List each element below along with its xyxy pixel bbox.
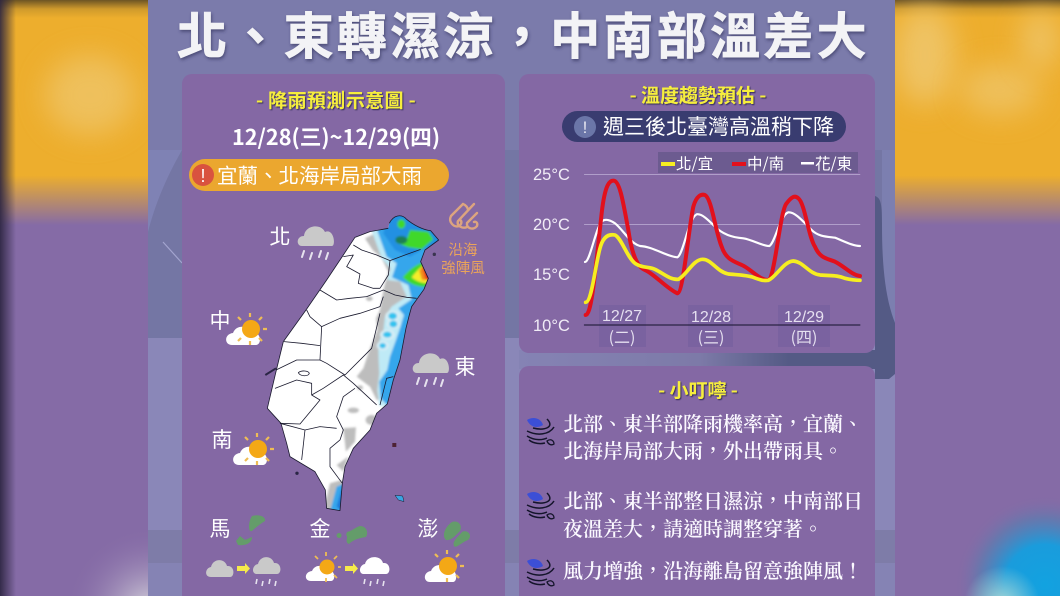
region labels: 南 bbox=[212, 424, 232, 454]
date range: 12/28(三)~12/29(四) bbox=[232, 121, 440, 152]
date labels bbox=[599, 305, 830, 348]
region labels: 澎 bbox=[418, 513, 438, 543]
y axis labels: 25°C bbox=[533, 166, 570, 184]
tip text 2: 夜溫差大，請適時調整穿著。 bbox=[563, 513, 823, 542]
heading: rainfall: - 降雨預測示意圖 - bbox=[256, 86, 416, 113]
tip text 2: 北部、東半部整日濕涼，中南部日 bbox=[563, 485, 863, 514]
region labels: 馬 bbox=[210, 513, 230, 543]
icon: Kinmen islands bbox=[337, 526, 367, 544]
panel: temperature trend bbox=[519, 74, 875, 353]
date labels: (二) bbox=[609, 324, 635, 348]
icon: east rain cloud bbox=[413, 353, 449, 386]
tip text 3: 風力增強，沿海離島留意強陣風！ bbox=[563, 555, 863, 584]
tip text 1: 北海岸局部大雨，外出帶雨具。 bbox=[563, 435, 843, 464]
alert pill: ! bbox=[200, 166, 206, 186]
date labels: 12/27 bbox=[602, 308, 642, 325]
label: coastal gusts: 強陣風 bbox=[441, 257, 485, 278]
tip text 1: 北部、東半部降雨機率高，宜蘭、 bbox=[563, 408, 863, 437]
region labels: 北 bbox=[270, 221, 290, 251]
date labels: 12/29 bbox=[784, 309, 824, 326]
heading: temperature: - 溫度趨勢預估 - bbox=[630, 81, 766, 108]
heading: reminders: - 小叮嚀 - bbox=[658, 376, 738, 403]
legend: 花/東 bbox=[815, 152, 852, 174]
icon: Penghu weather bbox=[425, 550, 464, 582]
icon: central sun and cloud bbox=[226, 313, 267, 345]
note pill: ! bbox=[583, 118, 587, 137]
date labels: (三) bbox=[698, 324, 724, 348]
panel: rainfall forecast map bbox=[182, 74, 505, 596]
icon: Matsu weather bbox=[206, 557, 280, 586]
region labels bbox=[210, 221, 476, 543]
icon: Penghu islands bbox=[444, 522, 470, 547]
region labels: 東 bbox=[454, 351, 476, 381]
map of Taiwan with rainfall bbox=[265, 213, 447, 512]
icon: leaf and wind 1 bbox=[527, 418, 554, 445]
icon: north rain cloud bbox=[298, 226, 334, 259]
icon: south sun and cloud bbox=[233, 433, 274, 465]
legend bbox=[658, 152, 858, 174]
region labels: 金 bbox=[310, 513, 330, 543]
line chart bbox=[584, 174, 860, 325]
panel: reminders bbox=[519, 366, 875, 596]
icon: leaf and wind 3 bbox=[527, 559, 554, 586]
wind icon bbox=[450, 204, 477, 229]
region labels: 中 bbox=[210, 305, 230, 335]
label: coastal gusts: 沿海 bbox=[448, 239, 478, 260]
icon: Kinmen weather bbox=[306, 552, 389, 586]
y axis labels: 20°C bbox=[533, 216, 570, 234]
y axis labels bbox=[533, 166, 570, 335]
icon: leaf and wind 2 bbox=[527, 492, 554, 519]
y axis labels: 10°C bbox=[533, 317, 570, 335]
legend: 中/南 bbox=[747, 152, 784, 174]
legend: 北/宜 bbox=[676, 152, 713, 174]
alert pill: 宜蘭、北海岸局部大雨 bbox=[217, 159, 422, 189]
icon: Matsu islands bbox=[236, 515, 265, 545]
note pill: 週三後北臺灣高溫稍下降 bbox=[603, 111, 834, 141]
date labels: (四) bbox=[791, 324, 817, 348]
date labels: 12/28 bbox=[691, 309, 731, 326]
center backdrop column bbox=[148, 0, 895, 596]
y axis labels: 15°C bbox=[533, 266, 570, 284]
